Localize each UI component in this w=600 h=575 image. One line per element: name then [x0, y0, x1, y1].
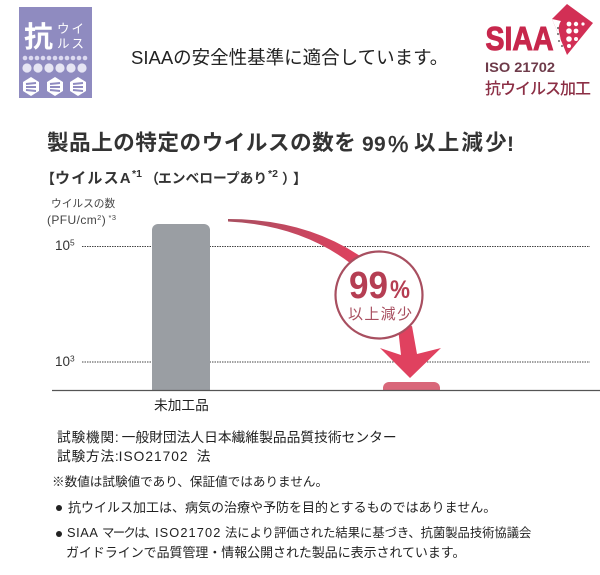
bullet notes: SIAA	[67, 525, 99, 540]
test information	[57, 430, 397, 464]
callout: 99% reduction: %	[390, 276, 410, 304]
bullet notes: ISO21702	[155, 525, 221, 540]
bullet notes: 抗ウイルス加工は、病気の治療や予防を目的とするものではありません。	[68, 500, 496, 515]
callout: 99% reduction	[336, 252, 422, 338]
chart title: *1	[132, 168, 142, 180]
chart title: 【	[41, 171, 55, 187]
logo: SIAA ISO 21702: SIAA	[486, 20, 554, 57]
chart title	[41, 168, 307, 187]
chart title: ）	[282, 171, 296, 187]
chart title: ウイルスA	[55, 170, 132, 187]
icon: antivirus badge: 抗	[24, 14, 53, 56]
headline	[47, 131, 514, 157]
axis title	[47, 198, 116, 227]
note: ※数値は試験値であり、保証値ではありません。	[52, 475, 328, 489]
chart title: 】	[293, 171, 307, 187]
arrow: curved reduction	[228, 219, 441, 378]
y-axis label 10^5: 105	[55, 237, 75, 253]
bar chart	[52, 219, 600, 392]
bar: untreated	[152, 224, 210, 390]
test information: 試験機関:一般財団法人日本繊維製品品質技術センター	[57, 430, 397, 445]
icon: antivirus badge: ルス	[57, 33, 86, 52]
y-axis label 10^3: 103	[55, 353, 75, 369]
bullet notes: マークは、	[102, 526, 155, 540]
bullet notes: ガイドラインで品質管理・情報公開された製品に表示されています。	[66, 545, 465, 560]
bar label: 未加工品	[154, 398, 209, 413]
logo: SIAA ISO 21702	[485, 4, 593, 99]
icon: antivirus badge: ウイ	[57, 18, 86, 37]
bullet notes: 法により評価された結果に基づき、抗菌製品技術協議会	[225, 526, 531, 540]
heading: SIAA compliance statement: SIAAの安全性基準に適合しています。	[131, 47, 448, 68]
headline: 以上減少	[414, 131, 509, 155]
icon: antivirus badge	[19, 7, 92, 98]
axis title: (PFU/cm2) *3	[47, 213, 116, 227]
chart title: （	[145, 171, 159, 187]
headline: %	[388, 131, 408, 157]
test information: 試験方法:ISO21702 法	[57, 449, 210, 464]
chart title: エンベロープあり	[158, 171, 267, 186]
headline: 99	[362, 133, 386, 156]
bar: treated	[383, 382, 440, 390]
logo: SIAA ISO 21702: ISO 21702	[485, 60, 555, 75]
headline: !	[507, 133, 514, 156]
callout: 99% reduction: 99	[349, 265, 388, 307]
chart title: *2	[268, 168, 278, 180]
callout: 99% reduction: 以上減少	[348, 303, 412, 324]
headline: 製品上の特定のウイルスの数を	[47, 131, 356, 155]
bullet notes	[56, 500, 531, 560]
logo: SIAA ISO 21702: 抗ウイルス加工	[485, 75, 591, 99]
axis title: ウイルスの数	[51, 198, 115, 210]
